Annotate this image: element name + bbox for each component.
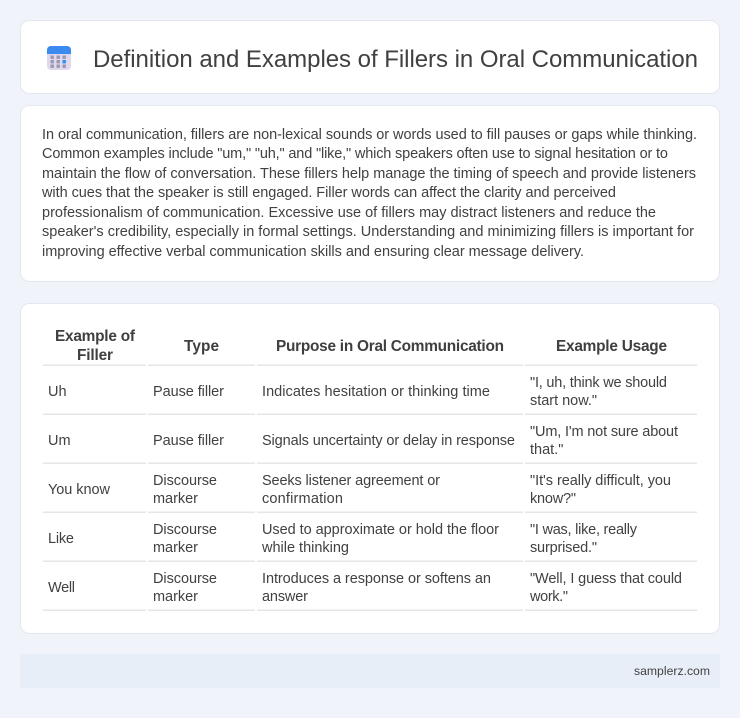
- table row: Um: [43, 424, 697, 464]
- text block: paragraph: speaker's credibility, especially in formal settings. Understanding and minimizing fillers is important for: [42, 224, 694, 240]
- footer: [20, 654, 720, 688]
- table row: Well: "Well, I guess that could: [530, 571, 682, 587]
- table header row: Purpose in Oral Communication: [276, 338, 504, 355]
- table header row: [43, 328, 697, 366]
- table row: You know: You know: [48, 482, 111, 498]
- table row: Um: "Um, I'm not sure about: [530, 424, 678, 440]
- title: Definition and Examples of Fillers in Oral Communication: [93, 46, 698, 73]
- table row: Uh: Uh: [48, 384, 67, 400]
- text block: paragraph: Common examples include "um," "uh," and "like," which speakers often use to signal hesitation or to: [42, 146, 668, 162]
- panel: filler table: [20, 304, 720, 634]
- table row: Uh: start now.": [530, 393, 597, 409]
- table row: You know: know?": [530, 491, 576, 507]
- text block: paragraph: with cues that the speaker is still engaged. Filler words can affect the clarity and perceived: [41, 185, 616, 201]
- table row: Well: answer: [262, 589, 308, 605]
- text block: paragraph: improving effective verbal communication skills and ensuring clear message delivery.: [42, 244, 584, 260]
- table row: Um: that.": [530, 442, 563, 458]
- text block: paragraph: maintain the flow of conversation. These fillers help manage the timing of speech and provide listeners: [42, 166, 696, 182]
- footer text: source: samplerz.com: [634, 664, 710, 678]
- table row: You know: Seeks listener agreement or: [262, 473, 440, 489]
- table row: You know: confirmation: [262, 491, 343, 507]
- table header row: Example of: [55, 328, 136, 345]
- table row: Uh: "I, uh, think we should: [530, 375, 667, 391]
- panel: header: [20, 20, 720, 94]
- text block: paragraph: professionalism of communication. Excessive use of fillers may distract listeners and reduce the: [42, 205, 656, 221]
- table row: Um: Pause filler: [153, 433, 224, 449]
- table row: Like: marker: [153, 540, 198, 556]
- table row: Like: Used to approximate or hold the floor: [262, 522, 499, 538]
- table row: Well: Discourse: [153, 571, 217, 587]
- table row: Uh: Indicates hesitation or thinking time: [262, 384, 490, 400]
- table row: Um: Signals uncertainty or delay in response: [262, 433, 515, 449]
- table row: Well: Well: [48, 580, 75, 596]
- table row: Like: Discourse: [153, 522, 217, 538]
- icon: calendar: [47, 46, 71, 70]
- table row: Uh: Pause filler: [153, 384, 224, 400]
- table header row: Type: [184, 338, 219, 355]
- table row: Well: work.": [529, 589, 568, 605]
- table header row: Example Usage: [556, 338, 667, 355]
- table header row: Filler: [77, 347, 113, 364]
- table row: You know: "It's really difficult, you: [530, 473, 671, 489]
- table row: Like: Like: [48, 531, 74, 547]
- panel: definition paragraph: [20, 106, 720, 282]
- text block: paragraph: In oral communication, fillers are non-lexical sounds or words used to fill pauses or gaps while thinking.: [42, 127, 697, 143]
- table row: Like: [43, 522, 697, 562]
- table row: Well: marker: [153, 589, 198, 605]
- table row: Uh: [43, 375, 697, 415]
- table row: You know: Discourse: [153, 473, 217, 489]
- table row: Like: while thinking: [261, 540, 349, 556]
- table row: Like: "I was, like, really: [530, 522, 638, 538]
- table row: Um: Um: [48, 433, 71, 449]
- table row: Like: surprised.": [530, 540, 597, 556]
- table row: You know: [43, 473, 697, 513]
- table row: Well: [43, 571, 697, 611]
- table row: Well: Introduces a response or softens an: [262, 571, 491, 587]
- text block: paragraph: [41, 127, 697, 260]
- table row: You know: marker: [153, 491, 198, 507]
